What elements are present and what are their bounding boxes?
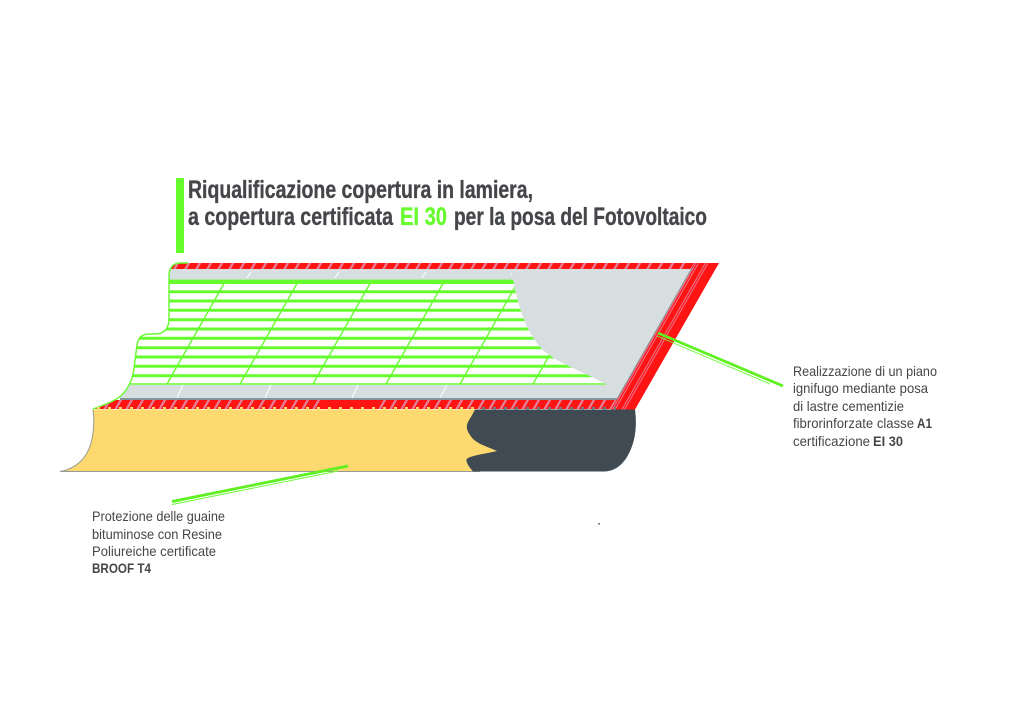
grey sheet with curled corner (511, 269, 691, 398)
grey edge of sheet (617, 268, 692, 399)
leader line left (172, 466, 348, 504)
grey outline of yellow layer (60, 410, 480, 472)
callout: fire-resistant plane: di lastre cementizie (793, 398, 904, 414)
green roof outline (93, 263, 188, 409)
green diagonal lines (167, 280, 592, 384)
callout: fire-resistant plane: ignifugo mediante posa (793, 380, 928, 396)
callout: bitumen protection: BROOF T4 (92, 560, 151, 576)
title: EI 30 (400, 203, 447, 231)
callout: fire-resistant plane: certificazione (793, 433, 870, 449)
yellow resin layer (60, 410, 510, 472)
white field (120, 281, 640, 385)
callout: bitumen protection (92, 508, 225, 576)
roof diagram (60, 263, 720, 472)
grey bottom band (100, 385, 630, 398)
title: per la posa del Fotovoltaico (454, 203, 707, 231)
callout: fire-resistant plane: A1 (917, 415, 932, 431)
grey top band (170, 269, 691, 280)
teeth on dark layer (475, 407, 616, 410)
red top edge band (160, 263, 720, 270)
callout: fire-resistant plane: EI 30 (873, 433, 903, 449)
roof upper layers (90, 263, 720, 410)
green thin top and bottom lines (120, 280, 640, 384)
teeth on yellow layer (97, 407, 475, 410)
title accent bar (176, 178, 184, 253)
callout: bitumen protection: Protezione delle guaine (92, 508, 225, 524)
title (188, 176, 707, 231)
solid red segment (324, 400, 376, 409)
red bottom band (90, 400, 625, 410)
title: Riqualificazione copertura in lamiera, (188, 176, 533, 204)
callout: fire-resistant plane: fibrorinforzate classe (793, 415, 914, 431)
white ticks on top band (246, 272, 512, 278)
callout: fire-resistant plane: Realizzazione di un piano (793, 363, 937, 379)
callout: fire-resistant plane (793, 363, 937, 449)
callout: bitumen protection: bituminose con Resine (92, 526, 222, 542)
white ticks on bottom band (177, 385, 535, 398)
red right edge band (611, 263, 719, 410)
green horizontal lines (120, 282, 640, 376)
pale lines on right band (612, 263, 708, 410)
dark bitumen layer (466, 410, 636, 472)
leader line right (657, 333, 783, 386)
title: a copertura certificata (188, 203, 394, 231)
callout: bitumen protection: Poliureiche certificate (92, 543, 216, 559)
dark line under bottom band (120, 398, 617, 400)
